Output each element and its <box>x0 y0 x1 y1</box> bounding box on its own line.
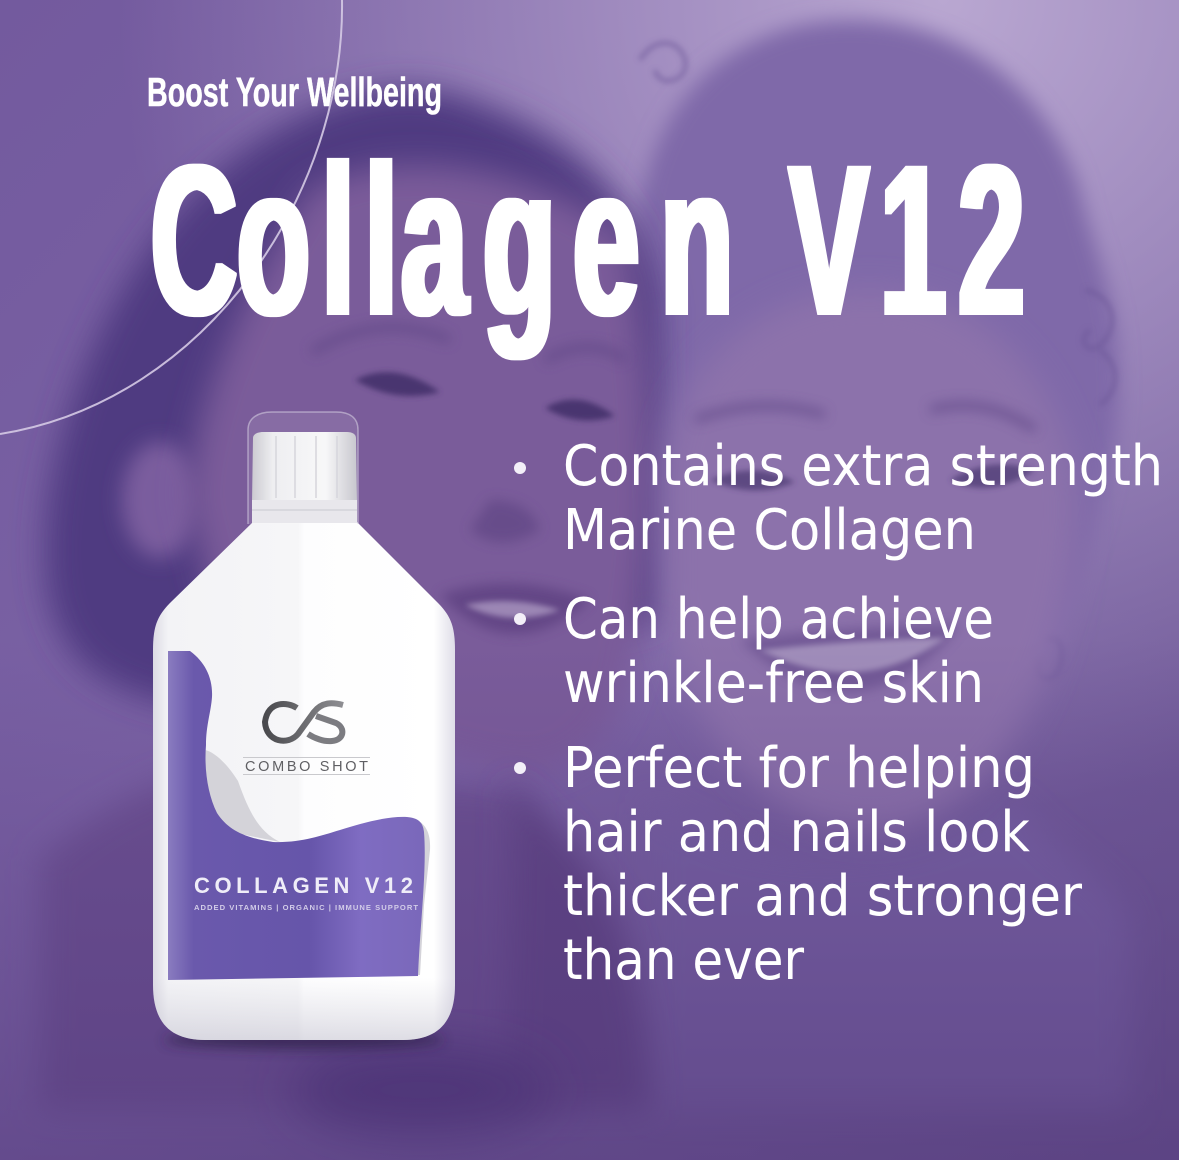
clear overcap <box>248 412 358 524</box>
logo rule lines <box>243 758 370 774</box>
title: Collagen V12 <box>151 120 1025 360</box>
bullet 3: Perfect for helping <box>563 736 1035 801</box>
bullet 2: wrinkle-free skin <box>563 651 984 716</box>
label tagline: ADDED VITAMINS | ORGANIC | IMMUNE SUPPORT <box>194 903 418 912</box>
bullet 2 <box>514 587 994 716</box>
bullet 3: hair and nails look <box>563 800 1031 865</box>
bullet 1 <box>514 434 1163 563</box>
right woman hair <box>635 20 1119 678</box>
bottle body <box>153 522 455 1040</box>
bottle product image <box>153 412 455 1049</box>
purple label <box>168 651 425 980</box>
bullet 1: Marine Collagen <box>563 498 976 563</box>
bullet 2: Can help achieve <box>563 587 994 652</box>
grey swoosh on label <box>205 750 430 975</box>
bullet 3: than ever <box>563 928 805 993</box>
logo mark <box>265 703 343 741</box>
left woman hair and bun <box>46 88 660 720</box>
bullet 3: thicker and stronger <box>563 864 1083 929</box>
bullet list <box>514 434 1163 993</box>
left woman ear <box>122 442 198 558</box>
left woman face <box>188 165 651 772</box>
subtitle: Boost Your Wellbeing <box>147 69 442 115</box>
bottle cap <box>248 412 358 524</box>
dark arm region <box>500 780 650 1110</box>
logo wordmark: COMBO SHOT <box>245 759 368 775</box>
right woman neck and chest <box>650 800 1130 1110</box>
dark base under bottle <box>290 1045 550 1135</box>
left woman shoulder <box>40 770 570 1110</box>
bottle shadow <box>164 1031 444 1049</box>
decorative arc line <box>0 0 342 434</box>
bullet 3 <box>514 736 1083 993</box>
facial features <box>312 328 1035 691</box>
right woman face <box>665 290 1076 832</box>
label product name: COLLAGEN V12 <box>194 873 413 898</box>
